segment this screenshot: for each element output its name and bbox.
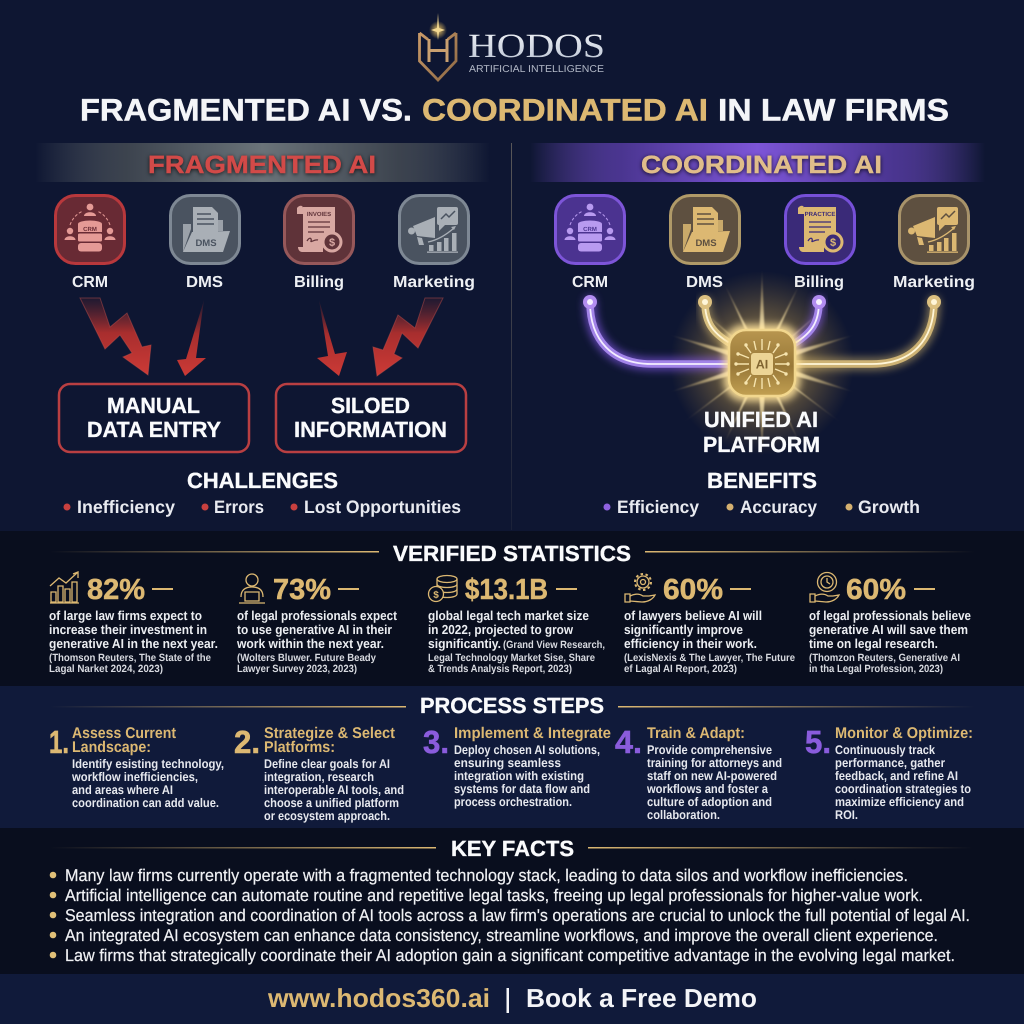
description: of lawyers believe AI will: [624, 608, 762, 623]
icon: DMS (fragmented): DMS: [195, 238, 217, 249]
step 2: choose a unified platform: [264, 796, 399, 810]
step 4: [615, 724, 782, 822]
icon: DMS (fragmented): [170, 196, 240, 264]
description: [49, 608, 218, 675]
panel: verified statistics: [0, 531, 1024, 686]
list: benefits: Efficiency: [617, 497, 699, 517]
description: global legal tech market size: [428, 608, 589, 623]
callout: siloed information: [276, 384, 466, 452]
description: work within the next year.: [236, 636, 384, 651]
description: of large law firms expect to: [49, 608, 202, 623]
icon: CRM (fragmented): [56, 196, 124, 264]
stat: 82%: [49, 572, 218, 675]
list: key facts: [50, 866, 970, 965]
description: significantly improve: [624, 622, 743, 637]
heading: benefits: BENEFITS: [707, 468, 817, 493]
step 1: Identify esisting technology,: [72, 757, 224, 771]
title: FRAGMENTED AI VS.: [80, 92, 412, 128]
description: [236, 608, 398, 675]
icon: shield with star: [420, 13, 456, 80]
description: to use generative AI in their: [237, 622, 392, 637]
step 1: workflow inefficiencies,: [71, 770, 198, 784]
wordmark: HODOS: [468, 28, 605, 65]
list: key facts: An integrated AI ecosystem can enhance data consistency, streamline workflows, and improve the overall client experience.: [65, 926, 938, 945]
step 3: Deploy chosen AI solutions,: [454, 743, 600, 757]
step 2: Strategize & Select: [264, 725, 395, 742]
step 4: culture of adoption and: [647, 795, 772, 809]
stat: $13.1B: [428, 574, 605, 675]
step 4: staff on new AI-powered: [647, 769, 777, 783]
step 5: ROI.: [835, 808, 858, 822]
list: benefits: Growth: [858, 497, 920, 517]
list: key facts: Many law firms currently operate with a fragmented technology stack, leading to data silos and workflow inefficiencies.: [65, 866, 908, 885]
step 1: 1.: [49, 724, 69, 760]
icon: CRM (coordinated): CRM: [583, 226, 597, 233]
step 2: 2.: [234, 724, 260, 760]
banner: fragmented AI: FRAGMENTED AI: [148, 151, 376, 179]
list: key facts: Artificial intelligence can automate routine and repetitive legal tasks, freeing up legal professionals for higher-value work.: [65, 886, 923, 905]
list: challenges: Inefficiency: [77, 497, 175, 517]
stat: 73%: [236, 574, 398, 675]
step 5: coordination strategies to: [835, 782, 971, 796]
connector: DMS to AI hub: [698, 295, 735, 346]
step 3: process orchestration.: [454, 795, 572, 809]
description: Lagal Narket 2024, 2023): [49, 663, 163, 675]
icon: DMS (coordinated): [670, 196, 740, 264]
list: challenges: Errors: [214, 497, 264, 517]
heading: challenges: CHALLENGES: [187, 468, 338, 493]
step 4: Train & Adapt:: [647, 725, 745, 742]
arrow: Billing to siloed information: [317, 300, 347, 376]
step 5: Continuously track: [835, 743, 935, 757]
step 5: Monitor & Optimize:: [835, 725, 973, 742]
description: (LexisNexis & The Lawyer, The Future: [624, 652, 795, 664]
description: (Wolters Bluwer. Future Beady: [237, 652, 376, 664]
step 3: Implement & Integrate: [454, 725, 611, 742]
panel: coordinated AI: [530, 143, 985, 517]
description: [624, 608, 795, 675]
banner: coordinated AI: COORDINATED AI: [641, 151, 882, 179]
step 3: 3.: [423, 724, 449, 760]
callout: manual data entry: DATA ENTRY: [87, 417, 221, 442]
step 3: ensuring seamless: [454, 756, 561, 770]
list: key facts: Law firms that strategically coordinate their AI adoption gain a significant competitive advantage in the evolving legal market.: [65, 946, 955, 965]
description: Lawyer Survey 2023, 2023): [237, 663, 357, 675]
value: 60%: [846, 574, 906, 606]
description: of legal professionals expect: [237, 608, 398, 623]
title: COORDINATED AI: [422, 92, 708, 128]
step 3: [423, 724, 611, 809]
icon: Billing (coordinated): [786, 196, 854, 264]
connector: Billing to AI hub: [790, 295, 826, 346]
label: unified AI platform: PLATFORM: [703, 432, 820, 457]
banner: fragmented AI: [35, 143, 490, 182]
label: CRM: CRM: [572, 274, 608, 291]
stat: 60% research time: [809, 572, 971, 675]
list: challenges: [64, 497, 461, 517]
icon: Billing (fragmented): $: [329, 237, 335, 249]
stat: 60% efficiency: [624, 574, 795, 675]
description: generative AI will save them: [809, 622, 968, 637]
label: DMS: DMS: [186, 274, 223, 291]
banner: coordinated AI: [530, 143, 985, 182]
list: benefits: [604, 497, 920, 517]
callout: manual data entry: MANUAL: [107, 393, 200, 418]
step 1: [49, 724, 224, 810]
description: Legal Technology Market Sise, Share: [428, 652, 595, 664]
step 5: 5.: [805, 724, 831, 760]
logo: Hodos Artificial Intelligence: [420, 13, 605, 80]
icon: CRM (fragmented): CRM: [83, 226, 97, 233]
step 5: feedback, and refine AI: [835, 769, 958, 783]
step 2: or ecosystem approach.: [264, 809, 390, 823]
icon: clock in hand: [810, 572, 839, 602]
callout: siloed information: SILOED: [331, 393, 410, 418]
value: 73%: [273, 574, 331, 606]
callout: manual data entry: [59, 384, 249, 452]
value: 82%: [87, 574, 145, 606]
label: Marketing: Marketing: [893, 274, 975, 291]
step 2: interoperable AI tools, and: [264, 783, 404, 797]
description: time on legal research.: [809, 636, 938, 651]
step 2: Define clear goals for AI: [264, 757, 390, 771]
description: & Trends Analysis Report, 2023): [428, 663, 572, 675]
label: unified AI platform: [703, 407, 820, 457]
icon: Billing (fragmented): INVOIES: [307, 211, 331, 218]
heading: verified statistics: VERIFIED STATISTICS: [393, 541, 631, 566]
step 4: 4.: [615, 724, 642, 760]
description: in 2022, projected to grow: [428, 622, 574, 637]
icon: coins: $: [433, 590, 439, 601]
icon: person at laptop: [239, 574, 265, 603]
label: Marketing: Marketing: [393, 274, 475, 291]
callout: siloed information: INFORMATION: [294, 417, 447, 442]
step 1: coordination can add value.: [72, 796, 219, 810]
list: challenges: Lost Opportunities: [304, 497, 461, 517]
heading: key facts: KEY FACTS: [451, 836, 574, 861]
arrow: Marketing to siloed information: [373, 298, 443, 376]
step 4: Provide comprehensive: [647, 743, 772, 757]
icon: unified AI hub chip: [724, 325, 800, 401]
description: significantiy.: [428, 636, 501, 651]
step 5: maximize efficiency and: [835, 795, 964, 809]
description: ef Lagal AI Report, 2023): [624, 663, 737, 675]
step 5: [805, 724, 973, 822]
icon: growth chart: [50, 572, 79, 603]
icon: unified AI hub chip: AI: [756, 358, 768, 372]
call to action: Book a Free Demo: [526, 983, 757, 1013]
panel: process steps: [0, 686, 1024, 828]
arrow: CRM to manual data entry: [80, 298, 151, 375]
description: in tha Legal Profession, 2023): [809, 663, 943, 675]
icon: Billing (coordinated): PRACTICE: [805, 211, 835, 218]
icon: Billing (coordinated): $: [830, 237, 836, 249]
step 1: Assess Current: [72, 725, 176, 742]
connector: Marketing to AI hub: [790, 295, 941, 364]
description: of legal professionals believe: [809, 608, 971, 623]
icon: coins: [428, 576, 457, 602]
description: [428, 608, 605, 675]
website link: www.hodos360.ai: [267, 983, 490, 1013]
step 3: systems for data flow and: [454, 782, 590, 796]
panel: footer call to action: [0, 974, 1024, 1024]
description: increase their investment in: [49, 622, 207, 637]
description: [809, 608, 971, 675]
label: Billing: Billing: [794, 274, 844, 291]
label: unified AI platform: UNIFIED AI: [704, 407, 818, 432]
arrow: DMS to manual data entry: [177, 300, 206, 376]
description: generative AI in the next year.: [49, 636, 218, 651]
list: key facts: Seamless integration and coordination of AI tools across a law firm's operations are crucial to unlock the full potential of legal AI.: [65, 906, 970, 925]
description: (Thomzon Reuters, Generative AI: [809, 652, 960, 664]
step 2: [234, 724, 404, 823]
icon: DMS (coordinated): DMS: [695, 238, 717, 249]
icon: Marketing (coordinated): [900, 196, 968, 264]
description: efficiency in their work.: [624, 636, 757, 651]
step 1: and areas where AI: [72, 783, 173, 797]
panel: fragmented AI: [35, 143, 490, 517]
description: (Grand View Research,: [503, 639, 605, 651]
step 2: integration, research: [264, 770, 374, 784]
heading: process steps: PROCESS STEPS: [420, 693, 604, 718]
value: 60%: [663, 574, 723, 606]
step 1: Landscape:: [72, 739, 151, 756]
step 3: integration with existing: [454, 769, 584, 783]
label: DMS: DMS: [686, 274, 723, 291]
value: $13.1B: [465, 574, 548, 606]
label: Billing: Billing: [294, 274, 344, 291]
step 2: Platforms:: [264, 739, 335, 756]
step 4: workflows and foster a: [646, 782, 769, 796]
panel: key facts: [0, 828, 1024, 974]
list: benefits: Accuracy: [740, 497, 817, 517]
tagline: ARTIFICIAL INTELLIGENCE: [469, 64, 604, 75]
title: [80, 92, 949, 128]
step 4: training for attorneys and: [647, 756, 782, 770]
label: CRM: CRM: [72, 274, 108, 291]
title: IN LAW FIRMS: [718, 92, 949, 128]
step 5: performance, gather: [835, 756, 945, 770]
glow behind AI hub: [670, 270, 854, 456]
icon: gear in hand: [625, 574, 655, 602]
step 4: collaboration.: [647, 808, 720, 822]
description: (Thomson Reuters, The State of the: [49, 652, 211, 664]
connector: CRM to AI hub: [583, 295, 735, 364]
icon: Billing (fragmented): [284, 196, 354, 264]
icon: Marketing (fragmented): [400, 196, 468, 264]
icon: CRM (coordinated): [556, 196, 624, 264]
